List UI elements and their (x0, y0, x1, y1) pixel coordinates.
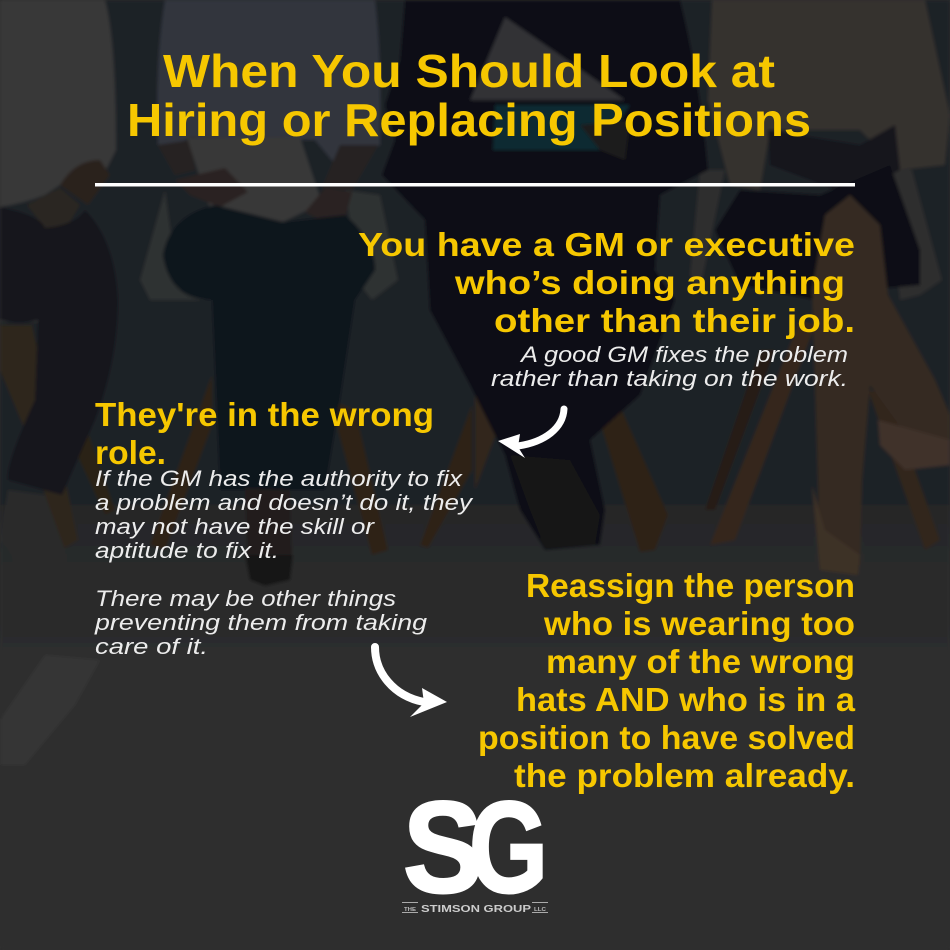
heading: reassign: who is wearing too (543, 605, 855, 642)
text block: wrong role details: a problem and doesn’t do it, they (95, 490, 474, 515)
heading: reassign: position to have solved (478, 719, 855, 756)
heading: wrong role: role. (95, 434, 166, 471)
heading: GM or executive: You have a GM or executive (358, 226, 855, 263)
logo: The Stimson Group: THE (404, 907, 416, 913)
text block: wrong role details: There may be other things (95, 586, 396, 611)
person 4 (708, 0, 950, 190)
title: When You Should Look at (163, 45, 775, 97)
text block: good GM: A good GM fixes the problem (519, 342, 848, 367)
text block: good GM: rather than taking on the work. (491, 366, 848, 391)
text block: wrong role details: aptitude to fix it. (95, 538, 279, 563)
logo: The Stimson Group (402, 774, 548, 920)
person 3 (382, 0, 708, 550)
logo: The Stimson Group: LLC (534, 907, 546, 913)
text block: wrong role details: may not have the skill or (95, 514, 376, 539)
heading: reassign: the problem already. (514, 757, 855, 794)
logo: The Stimson Group: G (469, 774, 548, 920)
person 1 (0, 0, 116, 207)
person 2 (157, 0, 380, 170)
text block: wrong role details (94, 466, 474, 659)
heading: reassign: many of the wrong (546, 643, 855, 680)
heading: wrong role (95, 396, 434, 471)
heading: reassign: hats AND who is in a (516, 681, 856, 718)
title: Hiring or Replacing Positions (127, 94, 811, 146)
text block: wrong role details: If the GM has the authority to fix (95, 466, 463, 491)
text block: good GM (491, 342, 848, 391)
heading: wrong role: They're in the wrong (95, 396, 434, 433)
heading: GM or executive: who’s doing anything (454, 264, 845, 301)
heading: reassign: Reassign the person (526, 567, 855, 604)
wood chair legs and seats (0, 325, 78, 550)
heading: GM or executive (358, 226, 855, 339)
title (127, 45, 811, 146)
heading: reassign (478, 567, 856, 794)
logo: The Stimson Group: S (403, 774, 483, 920)
arrow: to wrong role (498, 409, 564, 458)
text block: wrong role details: care of it. (95, 634, 208, 659)
logo: The Stimson Group: STIMSON GROUP (421, 904, 531, 915)
floor reflection (0, 655, 100, 765)
arrow: to reassign (375, 647, 447, 717)
text block: wrong role details: preventing them from taking (94, 610, 428, 635)
heading: GM or executive: other than their job. (494, 302, 855, 339)
